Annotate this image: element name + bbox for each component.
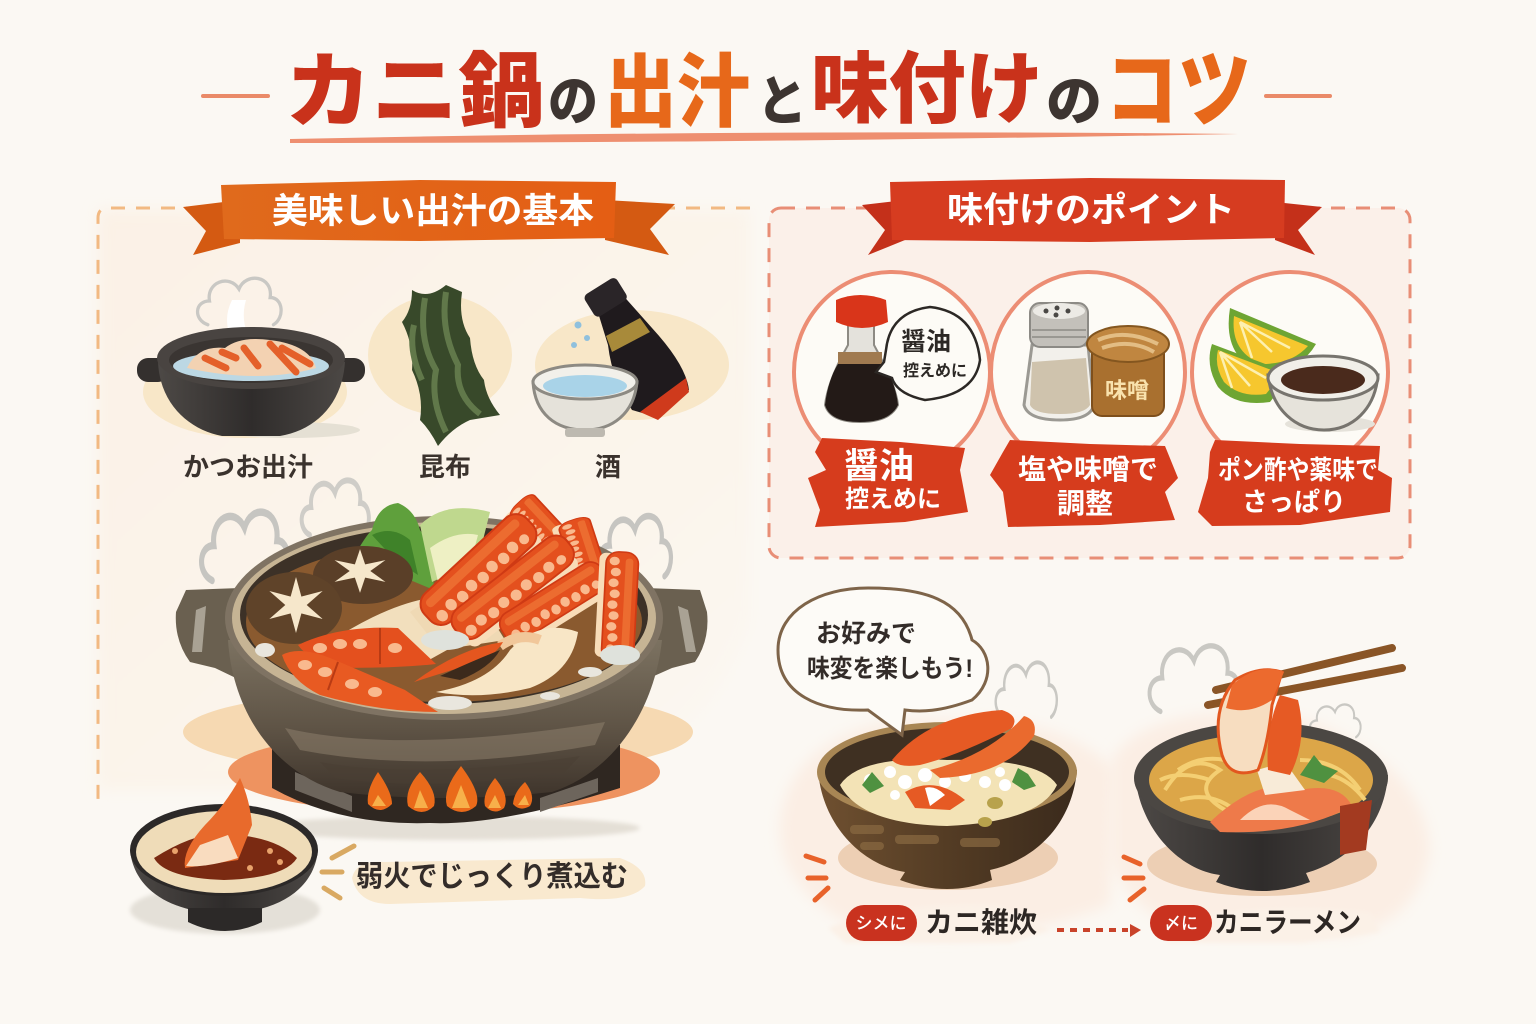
title: カニ鍋 [285,47,545,138]
cabbage [325,598,465,668]
greens [352,503,434,590]
label: sake: 酒 [595,452,621,482]
label: shime ramen [1124,857,1380,943]
illustration: crab ramen [1112,646,1430,935]
title [203,44,1330,143]
label: kombu: 昆布 [419,452,471,482]
title: 出汁 [604,48,750,137]
speech bubble: enjoy flavor change: お好みで [816,620,916,648]
label: salt and miso: 調整 [1057,488,1113,519]
label: shime ramen: カニラーメン [1214,907,1361,938]
chopsticks [1208,648,1402,705]
crab legs [502,491,571,561]
speech bubble: soy [876,307,980,400]
title: 味付け [811,45,1043,133]
label: soy: 控えめに [845,486,941,513]
soy sauce bottle [825,295,898,422]
arrow: porridge to ramen [1057,924,1141,937]
icon: katsuo dashi pot [137,278,365,438]
mushrooms [313,546,413,604]
label: salt and miso: 塩や味噌で [1018,454,1158,485]
callout: simmer on low heat [322,846,645,904]
ribbon heading: dashi basics: 美味しい出汁の基本 [272,192,594,231]
speech bubble: soy: 醤油 [901,328,951,356]
title: と [757,72,807,132]
title: コツ [1105,44,1251,138]
rim [225,516,663,720]
pot body [228,640,662,798]
foam [255,643,602,710]
illustration: dipping bowl with crab [130,778,320,934]
speech bubble: soy: 控えめに [903,362,967,380]
illustration: crab porridge [780,662,1115,936]
label: shime porridge: シメに [856,914,906,933]
label: ponzu: ポン酢や薬味で [1218,455,1378,485]
panel: dashi basics [98,208,750,805]
salt shaker [1024,303,1094,420]
ribbon heading: seasoning points [862,178,1322,255]
icon: kombu [368,285,512,446]
ribbon heading: dashi basics [183,180,675,255]
title: の [1046,72,1102,132]
label: katsuo dashi: かつお出汁 [183,452,313,482]
lower claws [298,628,436,668]
miso tub: 味噌 [1105,378,1149,403]
seasoning item: ponzu and condiments [1192,272,1392,526]
speech bubble: enjoy flavor change: 味変を楽しもう! [807,655,973,683]
speech bubble: enjoy flavor change [778,588,988,735]
seasoning item: salt and miso [990,272,1185,527]
flames [368,766,532,812]
label: salt and miso [990,440,1178,527]
label: ponzu [1198,440,1392,526]
label: soy: 醤油 [844,447,914,486]
foam under legs [421,630,640,665]
callout: simmer on low heat: 弱火でじっくり煮込む [356,860,628,893]
ribbon heading: seasoning points: 味付けのポイント [947,191,1235,230]
illustration: crab hot pot [176,480,708,840]
icon: sake bottle and bowl [533,276,729,437]
label: shime porridge [806,856,1050,943]
label: shime porridge: カニ雑炊 [925,907,1037,938]
ponzu bowl [1268,356,1378,432]
stove [272,745,620,823]
miso tub [1087,326,1169,416]
seasoning item: soy sauce [794,272,990,527]
label: shime ramen: 〆に [1164,914,1198,933]
title: の [548,72,598,132]
citrus slices [1210,308,1316,403]
label: ponzu: さっぱり [1242,487,1346,517]
handles [176,588,240,680]
label: soy [808,438,968,527]
claw meat [436,628,578,695]
lifted crab meat [1218,670,1282,773]
panel: seasoning points [769,208,1410,558]
